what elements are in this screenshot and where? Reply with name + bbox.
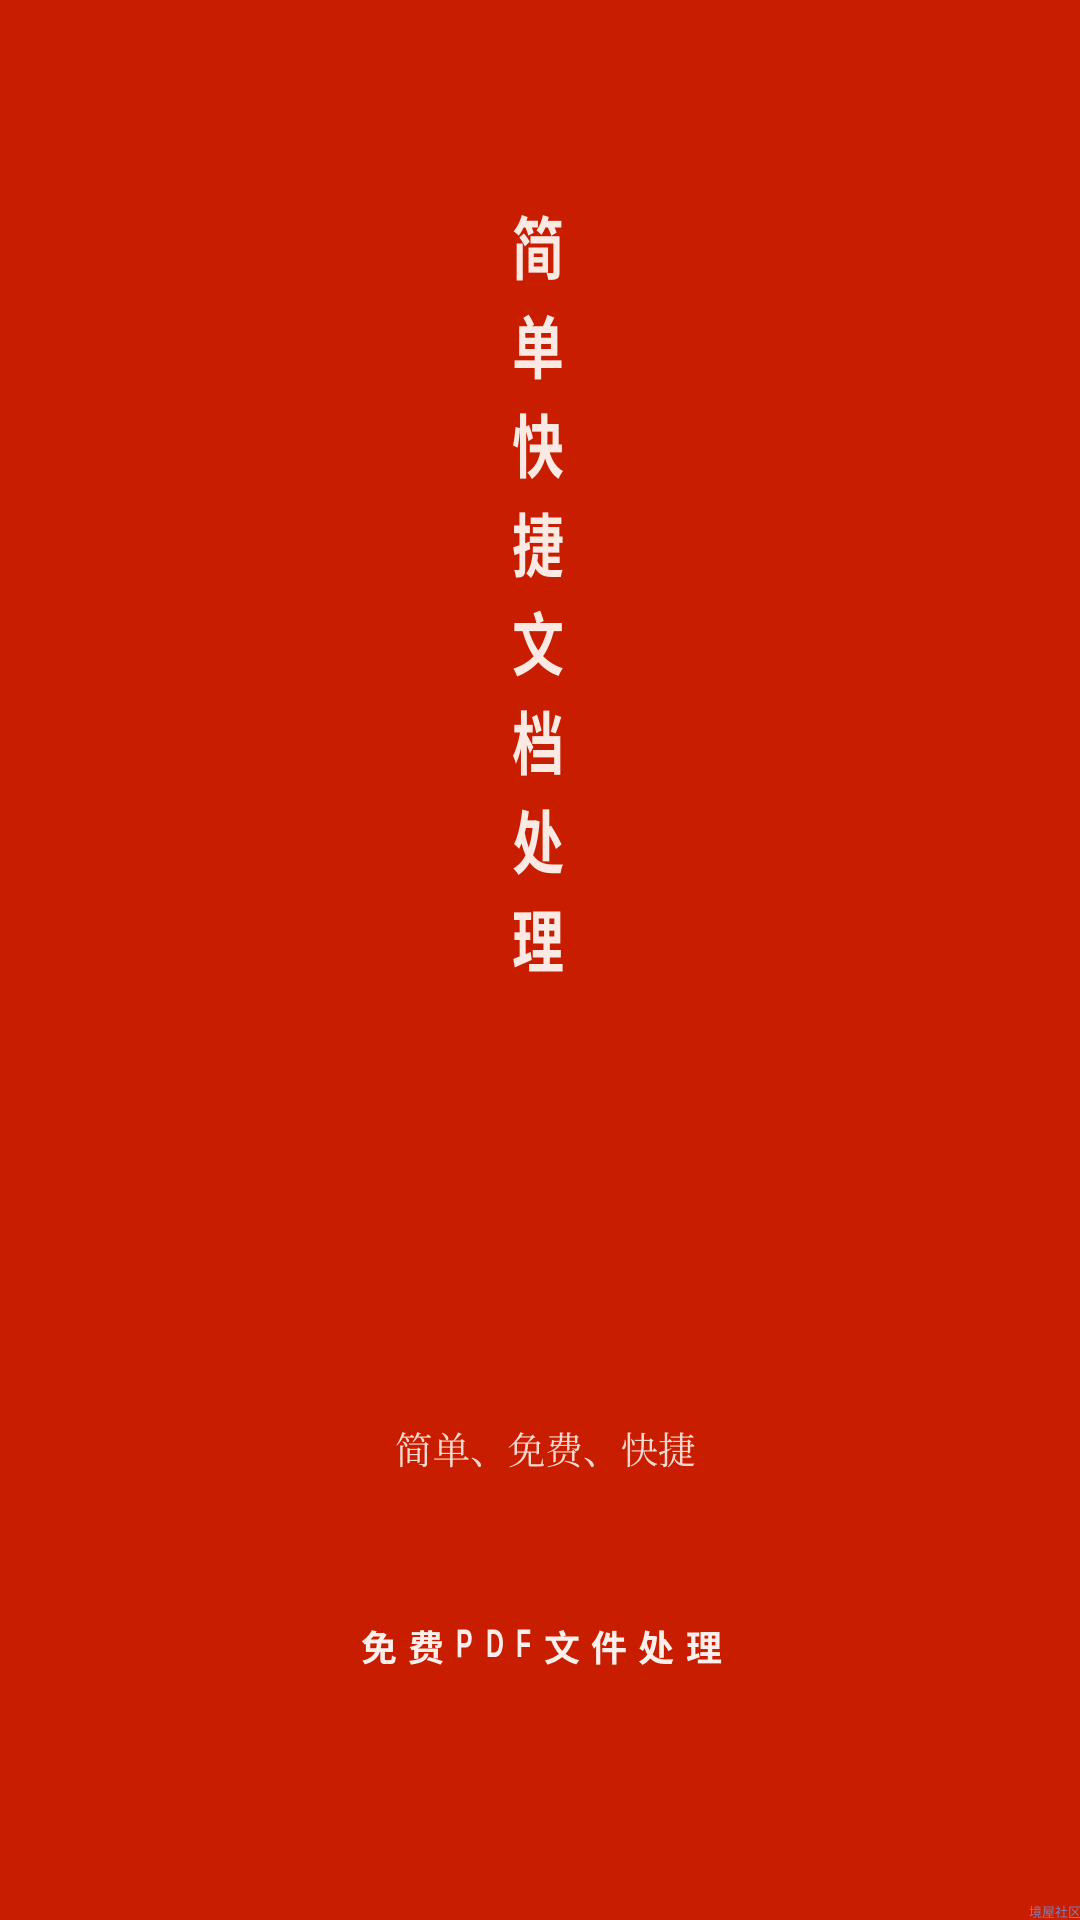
- title: vertical heading: 单: [512, 311, 564, 388]
- title: vertical heading: 理: [512, 905, 564, 982]
- title: vertical heading: 简: [512, 212, 564, 289]
- footer heading: free PDF file processing: 件: [591, 1628, 627, 1669]
- footer heading: free PDF file processing: D: [486, 1622, 504, 1666]
- title: vertical heading: 档: [512, 707, 564, 784]
- title: vertical heading: 捷: [512, 509, 564, 586]
- footer heading: free PDF file processing: 处: [638, 1628, 674, 1669]
- footer heading: free PDF file processing: [361, 1622, 722, 1669]
- title: vertical heading: 处: [512, 806, 564, 883]
- title: vertical heading: [512, 212, 564, 982]
- title: vertical heading: 文: [512, 608, 564, 685]
- footer heading: free PDF file processing: 免: [361, 1628, 397, 1669]
- title: vertical heading: 快: [512, 410, 564, 487]
- watermark: 境屋社区: [1029, 1905, 1080, 1920]
- footer heading: free PDF file processing: 文: [544, 1628, 580, 1669]
- footer heading: free PDF file processing: F: [516, 1622, 531, 1666]
- subtitle: 简单、免费、快捷: [395, 1432, 696, 1473]
- footer heading: free PDF file processing: 理: [686, 1628, 722, 1669]
- footer heading: free PDF file processing: P: [456, 1622, 473, 1666]
- footer heading: free PDF file processing: 费: [408, 1628, 444, 1669]
